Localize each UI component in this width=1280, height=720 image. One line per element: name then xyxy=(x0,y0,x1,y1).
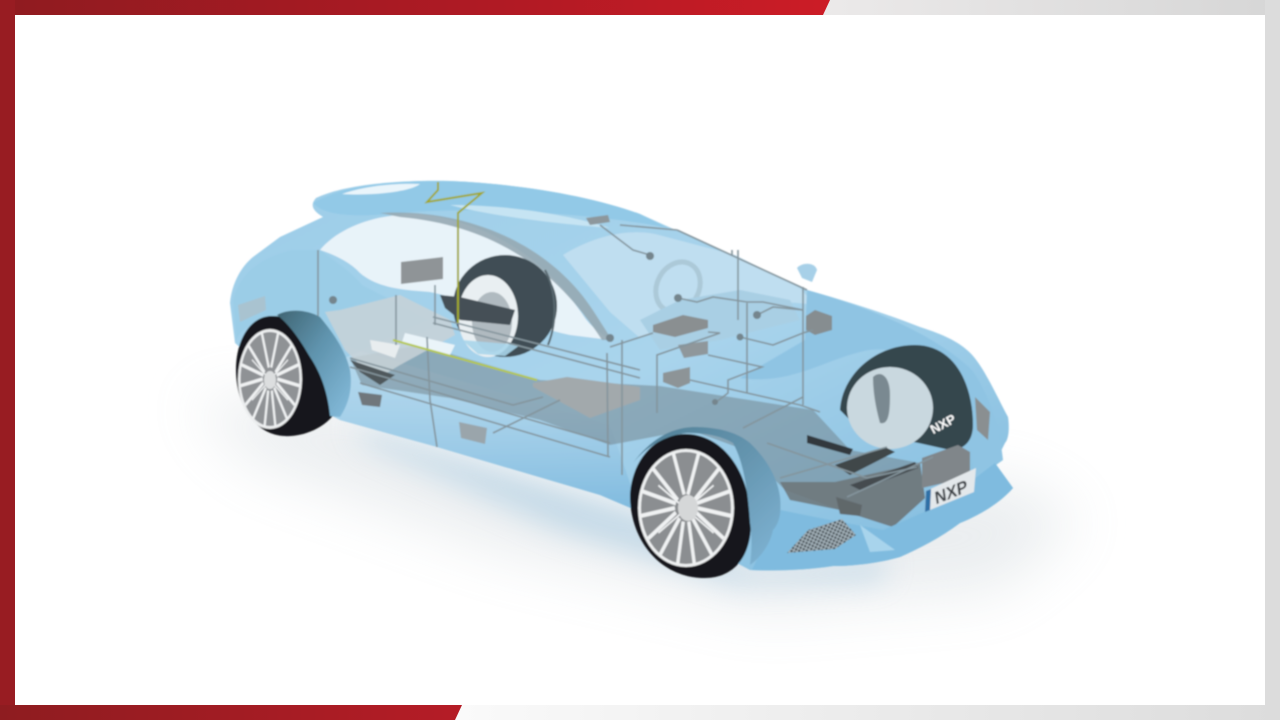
bonnet shading xyxy=(740,290,1003,480)
steering wheel xyxy=(647,254,709,320)
rear fender xyxy=(277,311,351,417)
green cable xyxy=(393,182,537,380)
rear wheel xyxy=(236,316,337,436)
car shadow xyxy=(190,400,1080,610)
roof sensor xyxy=(586,215,610,225)
front grille xyxy=(787,519,856,553)
wiring nodes xyxy=(329,252,814,405)
front radar box xyxy=(975,397,990,440)
number plate: NXP xyxy=(934,475,969,509)
frame: top red bar xyxy=(0,0,830,15)
front bumper and splitter xyxy=(752,463,1013,570)
spoiler and roof highlight xyxy=(313,181,668,228)
number plate xyxy=(925,468,976,512)
frame: top grey bar xyxy=(815,0,1280,15)
ECU box: cabin lower xyxy=(663,367,690,388)
NXP logo on tyre: NXP xyxy=(928,411,958,437)
ECU box: cabin top xyxy=(653,315,708,337)
rear light xyxy=(238,296,266,322)
rear inner wheel xyxy=(453,255,557,357)
mirror xyxy=(797,264,817,282)
battery block xyxy=(533,377,640,418)
front inner wheel xyxy=(840,345,973,450)
car xyxy=(230,181,1013,578)
cabin floor xyxy=(350,345,925,527)
roof rail xyxy=(380,212,612,340)
seat / dash shading xyxy=(640,290,800,350)
car body shell xyxy=(230,181,1013,570)
rear quarter panel xyxy=(233,250,430,360)
ECU box: rear lower xyxy=(358,392,382,407)
front wheel xyxy=(630,434,751,578)
frame: left red bar xyxy=(0,0,15,720)
ECU box: rear rectangle xyxy=(401,257,443,284)
ECU box: door sill xyxy=(459,422,487,444)
ECU box: right xyxy=(806,310,832,335)
front chassis xyxy=(780,435,970,527)
ECU box: cabin middle xyxy=(678,341,708,358)
frame: bottom red bar xyxy=(0,705,462,720)
rear side window xyxy=(320,214,610,340)
front fender xyxy=(633,427,781,565)
frame: bottom grey bar xyxy=(455,705,1280,720)
wiring harness xyxy=(318,225,933,497)
rear drivetrain xyxy=(325,295,515,385)
lower body panels xyxy=(340,345,640,512)
frame: right grey bar xyxy=(1265,0,1280,720)
windscreen xyxy=(563,232,815,338)
